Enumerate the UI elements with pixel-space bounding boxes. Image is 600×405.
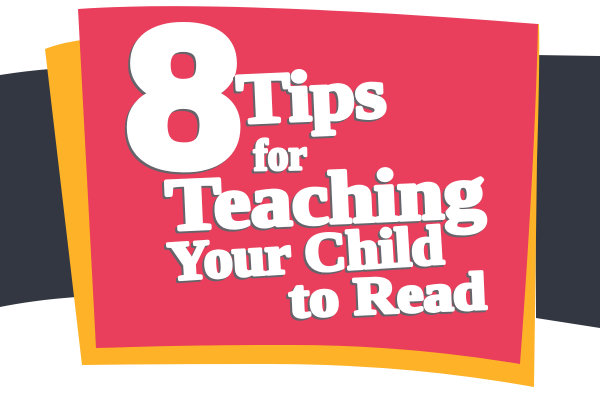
heading: to Read: to Read	[288, 262, 487, 329]
right dark ribbon	[535, 55, 600, 328]
heading: Your Child: Your Child	[166, 214, 445, 292]
heading: to Read: to Read	[286, 264, 485, 331]
heading: for: for	[251, 132, 305, 182]
heading: Your Child: Your Child	[164, 216, 443, 294]
heading: Teaching: Teaching	[164, 151, 486, 247]
heading: for: for	[253, 130, 307, 180]
red front page	[78, 6, 538, 364]
title	[124, 0, 487, 331]
left dark ribbon	[0, 69, 76, 307]
heading: Teaching: Teaching	[162, 153, 484, 249]
yellow back page	[45, 24, 539, 387]
heading: Tips: Tips	[233, 57, 386, 141]
heading: Tips: Tips	[235, 55, 388, 139]
